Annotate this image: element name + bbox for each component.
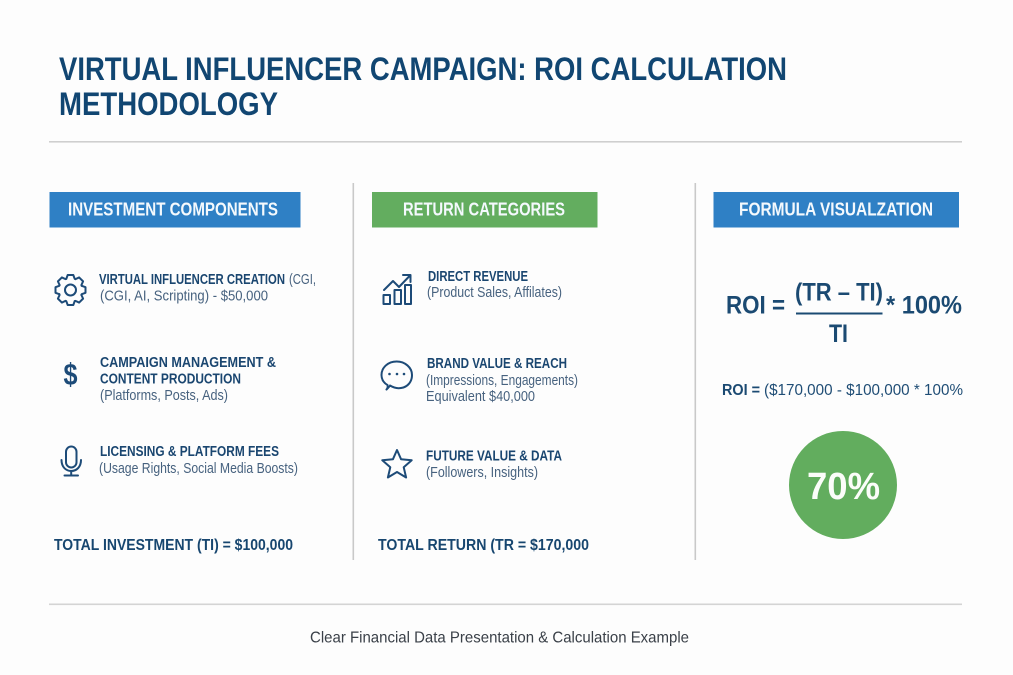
- heading: return categories: [372, 192, 598, 228]
- item: campaign management: CAMPAIGN MANAGEMENT &: [100, 355, 276, 371]
- calculation: ROI =: [722, 382, 760, 399]
- title: VIRTUAL INFLUENCER CAMPAIGN: ROI CALCULATION: [59, 51, 787, 87]
- item: virtual influencer creation: (CGI, AI, Scripting) - $50,000: [100, 288, 268, 304]
- title: METHODOLOGY: [59, 86, 278, 122]
- item: campaign management: CONTENT PRODUCTION: [100, 372, 241, 388]
- item: campaign management: (Platforms, Posts, Ads): [100, 388, 228, 404]
- total investment: TOTAL INVESTMENT (TI) = $100,000: [54, 537, 293, 554]
- item: brand value and reach: BRAND VALUE & REACH: [427, 356, 567, 372]
- total return: TOTAL RETURN (TR = $170,000: [378, 537, 589, 554]
- icon: growth chart: [384, 275, 411, 304]
- icon: star: [382, 450, 412, 478]
- heading: investment components: INVESTMENT COMPONENTS: [68, 200, 278, 220]
- item: virtual influencer creation: (CGI,: [289, 272, 316, 288]
- item: future value and data: (Followers, Insights): [426, 465, 538, 481]
- panel: return categories: [372, 192, 598, 554]
- item: brand value and reach: (Impressions, Engagements): [426, 373, 578, 389]
- heading: return categories: RETURN CATEGORIES: [403, 200, 565, 220]
- panel: formula visualization: [714, 192, 963, 539]
- item: brand value and reach: [426, 356, 578, 405]
- item: future value and data: [426, 448, 562, 481]
- result badge: 70%: 70%: [807, 466, 880, 508]
- panel: investment components: [50, 192, 316, 554]
- heading: formula visualization: [714, 192, 959, 228]
- heading: formula visualization: FORMULA VISUALZATION: [739, 200, 933, 220]
- item: direct revenue: (Product Sales, Affilates): [427, 285, 562, 301]
- item: virtual influencer creation: VIRTUAL INFLUENCER CREATION: [99, 272, 285, 288]
- result badge: 70%: [789, 431, 897, 539]
- footer caption: Clear Financial Data Presentation & Calculation Example: [310, 630, 689, 646]
- calculation: ($170,000 - $100,000 * 100%: [764, 382, 963, 399]
- icon: dollar: $: [64, 356, 78, 392]
- icon: speech bubble: [382, 362, 412, 390]
- item: licensing and platform fees: (Usage Rights, Social Media Boosts): [99, 461, 298, 477]
- item: licensing and platform fees: LICENSING & PLATFORM FEES: [100, 444, 279, 460]
- item: licensing and platform fees: [99, 444, 298, 477]
- item: brand value and reach: Equivalent $40,000: [426, 389, 535, 405]
- formula: * 100%: [886, 292, 962, 320]
- formula: TI: [829, 320, 848, 348]
- item: campaign management: [100, 355, 276, 404]
- title: [59, 51, 787, 122]
- formula: (TR – TI): [795, 278, 883, 306]
- item: direct revenue: DIRECT REVENUE: [428, 269, 528, 285]
- item: future value and data: FUTURE VALUE & DATA: [426, 448, 562, 464]
- item: virtual influencer creation: [99, 272, 316, 304]
- item: direct revenue: [427, 269, 562, 301]
- heading: investment components: [50, 192, 300, 228]
- icon: microphone: [62, 446, 81, 476]
- formula: [726, 278, 962, 348]
- icon: gear: [56, 275, 86, 305]
- formula: ROI =: [726, 292, 785, 320]
